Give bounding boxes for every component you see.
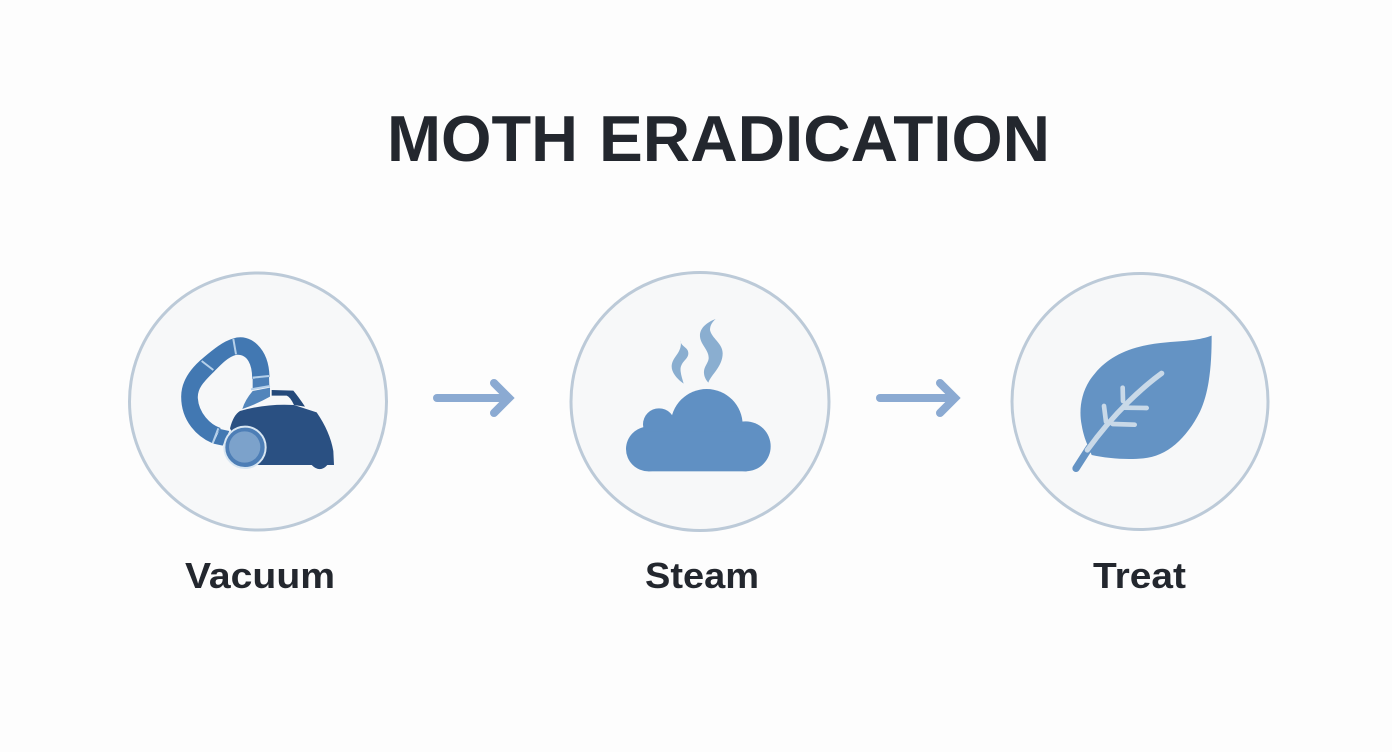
step 1: vacuum	[130, 273, 386, 530]
icon: vacuum cleaner	[182, 338, 334, 469]
label: steam: Steam	[645, 555, 759, 596]
title: ERADICATION	[599, 103, 1050, 175]
icon: steam cloud	[626, 319, 771, 471]
arrow: steam to treat	[880, 383, 955, 413]
circle: treat	[1012, 274, 1268, 530]
label: treat: Treat	[1093, 555, 1186, 596]
step 2: steam	[571, 272, 829, 530]
step 3: treat	[1012, 274, 1268, 530]
icon: leaf	[1076, 336, 1212, 468]
circle: steam	[571, 272, 829, 530]
circle: vacuum	[130, 273, 386, 530]
title	[387, 103, 1050, 175]
title: MOTH	[387, 103, 578, 175]
label: vacuum: Vacuum	[185, 555, 335, 596]
arrow: vacuum to steam	[437, 383, 509, 413]
